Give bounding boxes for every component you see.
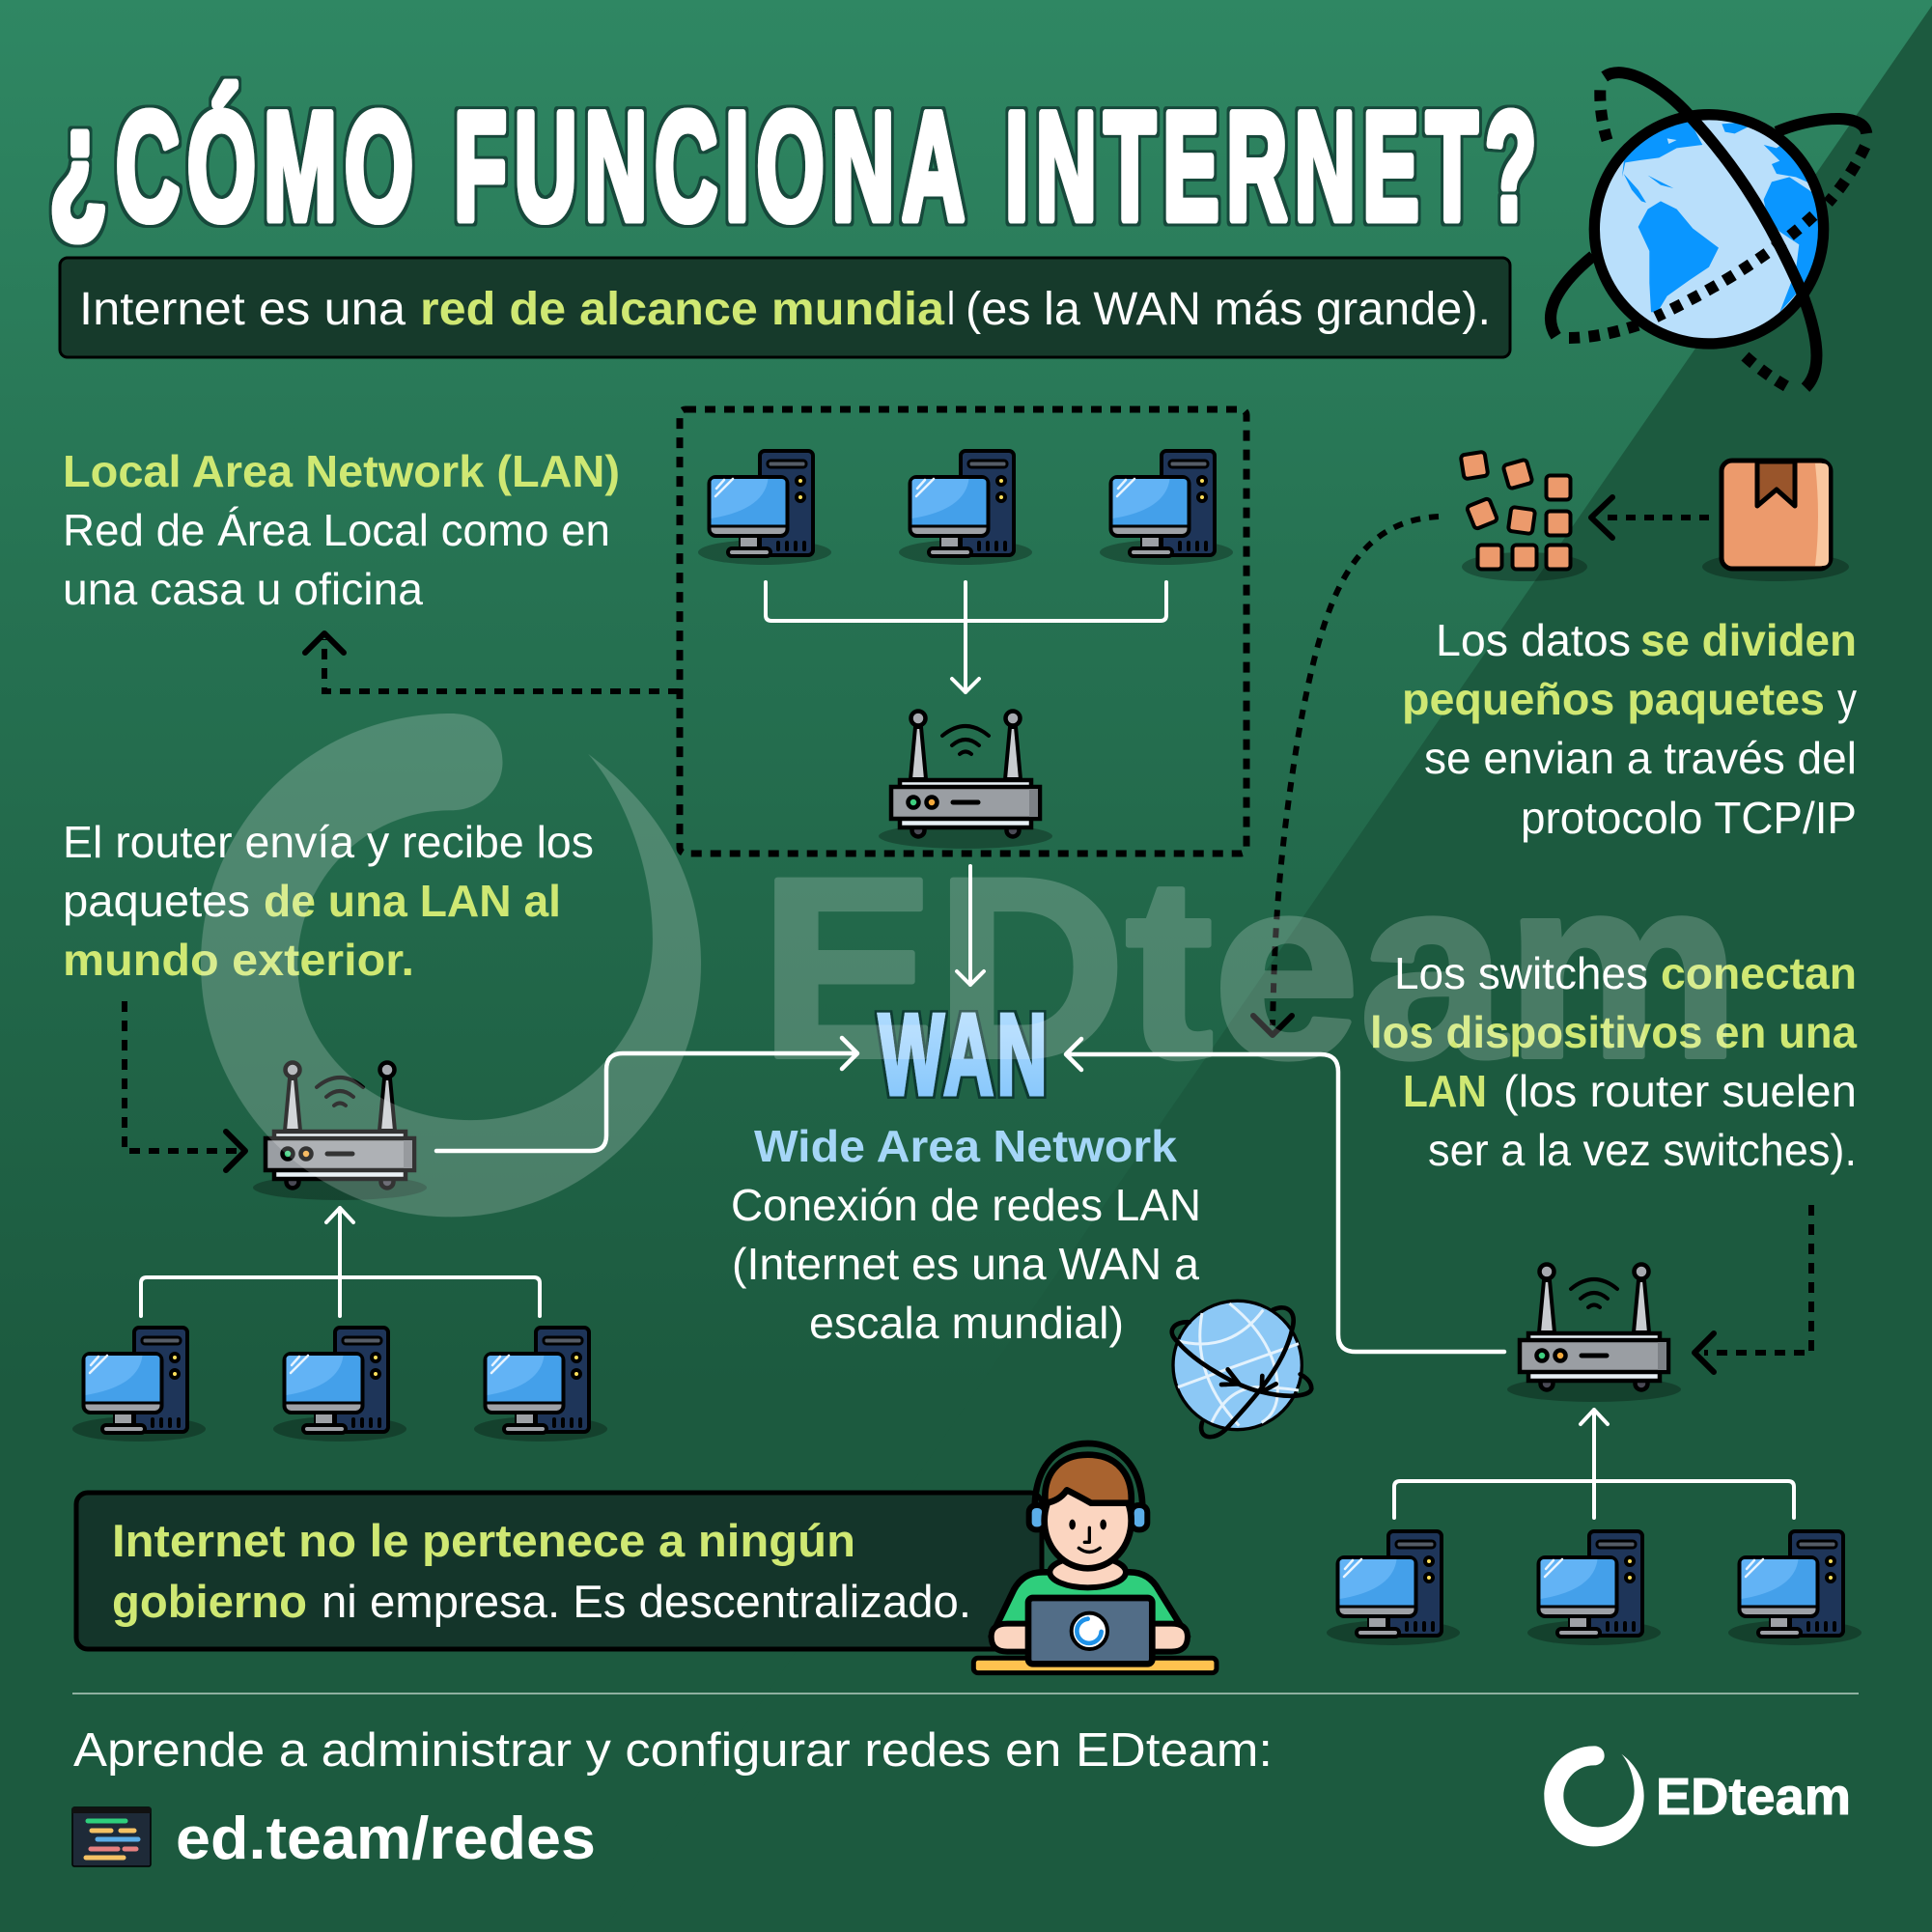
arrow: router text to left router	[125, 1001, 245, 1170]
callout: ni empresa. Es descentralizado.	[322, 1576, 971, 1627]
watermark: EDteam logo	[201, 714, 1740, 1217]
packets text block: pequeños paquetes	[1402, 674, 1825, 724]
logo: EDteam: EDteam	[1656, 1768, 1851, 1826]
icon: code window	[72, 1807, 151, 1866]
packets text block: se dividen	[1640, 615, 1857, 665]
link text: ed.team/redes	[176, 1806, 596, 1872]
title: FUNCIONA	[454, 80, 972, 252]
arrow: router to WAN	[957, 866, 984, 985]
packets text block: y	[1837, 674, 1857, 724]
arrow: left computers to router	[141, 1208, 540, 1316]
subtitle banner: l	[947, 284, 955, 335]
packets text block: Los datos	[1436, 615, 1631, 665]
arrow: computers to router	[766, 582, 1166, 692]
subtitle banner: (es la WAN más grande).	[966, 284, 1491, 335]
footer divider	[72, 1693, 1859, 1694]
packets text block	[1402, 615, 1857, 843]
router text block: de una LAN al	[264, 876, 561, 926]
arrow: box to packets	[1591, 497, 1709, 538]
subtitle banner	[60, 258, 1510, 357]
arrow: packets curved to WAN	[1253, 517, 1439, 1035]
arrow: left router to WAN	[436, 1038, 857, 1151]
right computers	[1327, 1531, 1862, 1645]
switches text block: ser a la vez switches).	[1428, 1125, 1857, 1175]
LAN text block: Red de Área Local como en	[63, 505, 610, 555]
switches text block: conectan	[1661, 948, 1857, 998]
WAN text block: Conexión de redes LAN	[731, 1180, 1201, 1230]
WAN text block: (Internet es una WAN a	[732, 1239, 1199, 1289]
packets text block: protocolo TCP/IP	[1521, 793, 1857, 843]
router text block: El router envía y recibe los	[63, 817, 594, 867]
top computers	[698, 451, 1233, 565]
icon: package box	[1702, 461, 1849, 581]
title	[49, 75, 1544, 252]
LAN text block: una casa u oficina	[63, 564, 423, 614]
arrow: right computers to router	[1394, 1410, 1794, 1518]
watermark: EDteam logo: EDteam	[760, 826, 1740, 1111]
router text block: paquetes	[63, 876, 250, 926]
subtitle banner: red de alcance mundia	[420, 284, 944, 335]
WAN text block: Wide Area Network	[754, 1121, 1177, 1171]
router text block: mundo exterior.	[63, 935, 414, 985]
title: ¿	[49, 75, 107, 247]
router text block	[63, 817, 594, 985]
subtitle banner: Internet es una	[79, 284, 406, 335]
switches text block: los dispositivos en una	[1370, 1007, 1857, 1057]
left computers	[72, 1328, 607, 1442]
switches text block: Los switches	[1394, 948, 1648, 998]
WAN heading: WAN	[879, 991, 1050, 1119]
switches text block: LAN	[1403, 1066, 1487, 1116]
callout: gobierno	[112, 1576, 307, 1627]
WAN text block: escala mundial)	[809, 1298, 1124, 1348]
icon: router right	[1507, 1265, 1681, 1402]
arrow: right router to WAN	[1066, 1039, 1504, 1352]
footer text: Aprende a administrar y configurar redes en EDteam:	[73, 1724, 1273, 1777]
WAN text block	[731, 1121, 1201, 1348]
icon: small globe	[1172, 1301, 1311, 1437]
callout: Internet no le pertenece a ningún	[112, 1515, 855, 1566]
LAN text block	[63, 446, 620, 614]
icon: router left	[253, 1062, 427, 1200]
logo: EDteam	[1544, 1746, 1851, 1846]
panel: LAN dotted box	[680, 409, 1246, 854]
icon: globe with orbits	[1551, 72, 1866, 388]
arrowhead LAN	[305, 633, 344, 653]
switches text block: (los router suelen	[1503, 1066, 1857, 1116]
icon: packets	[1461, 452, 1587, 581]
arrow: switches text to right router	[1694, 1205, 1811, 1372]
arrow: box to LAN text	[324, 639, 679, 691]
title: CÓMO	[116, 80, 421, 252]
packets text block: se envian a través del	[1424, 733, 1857, 783]
icon: router top	[879, 711, 1052, 849]
LAN text block: Local Area Network (LAN)	[63, 446, 620, 496]
callout	[76, 1493, 1042, 1649]
switches text block	[1370, 948, 1857, 1175]
icon: person with laptop	[973, 1443, 1217, 1673]
